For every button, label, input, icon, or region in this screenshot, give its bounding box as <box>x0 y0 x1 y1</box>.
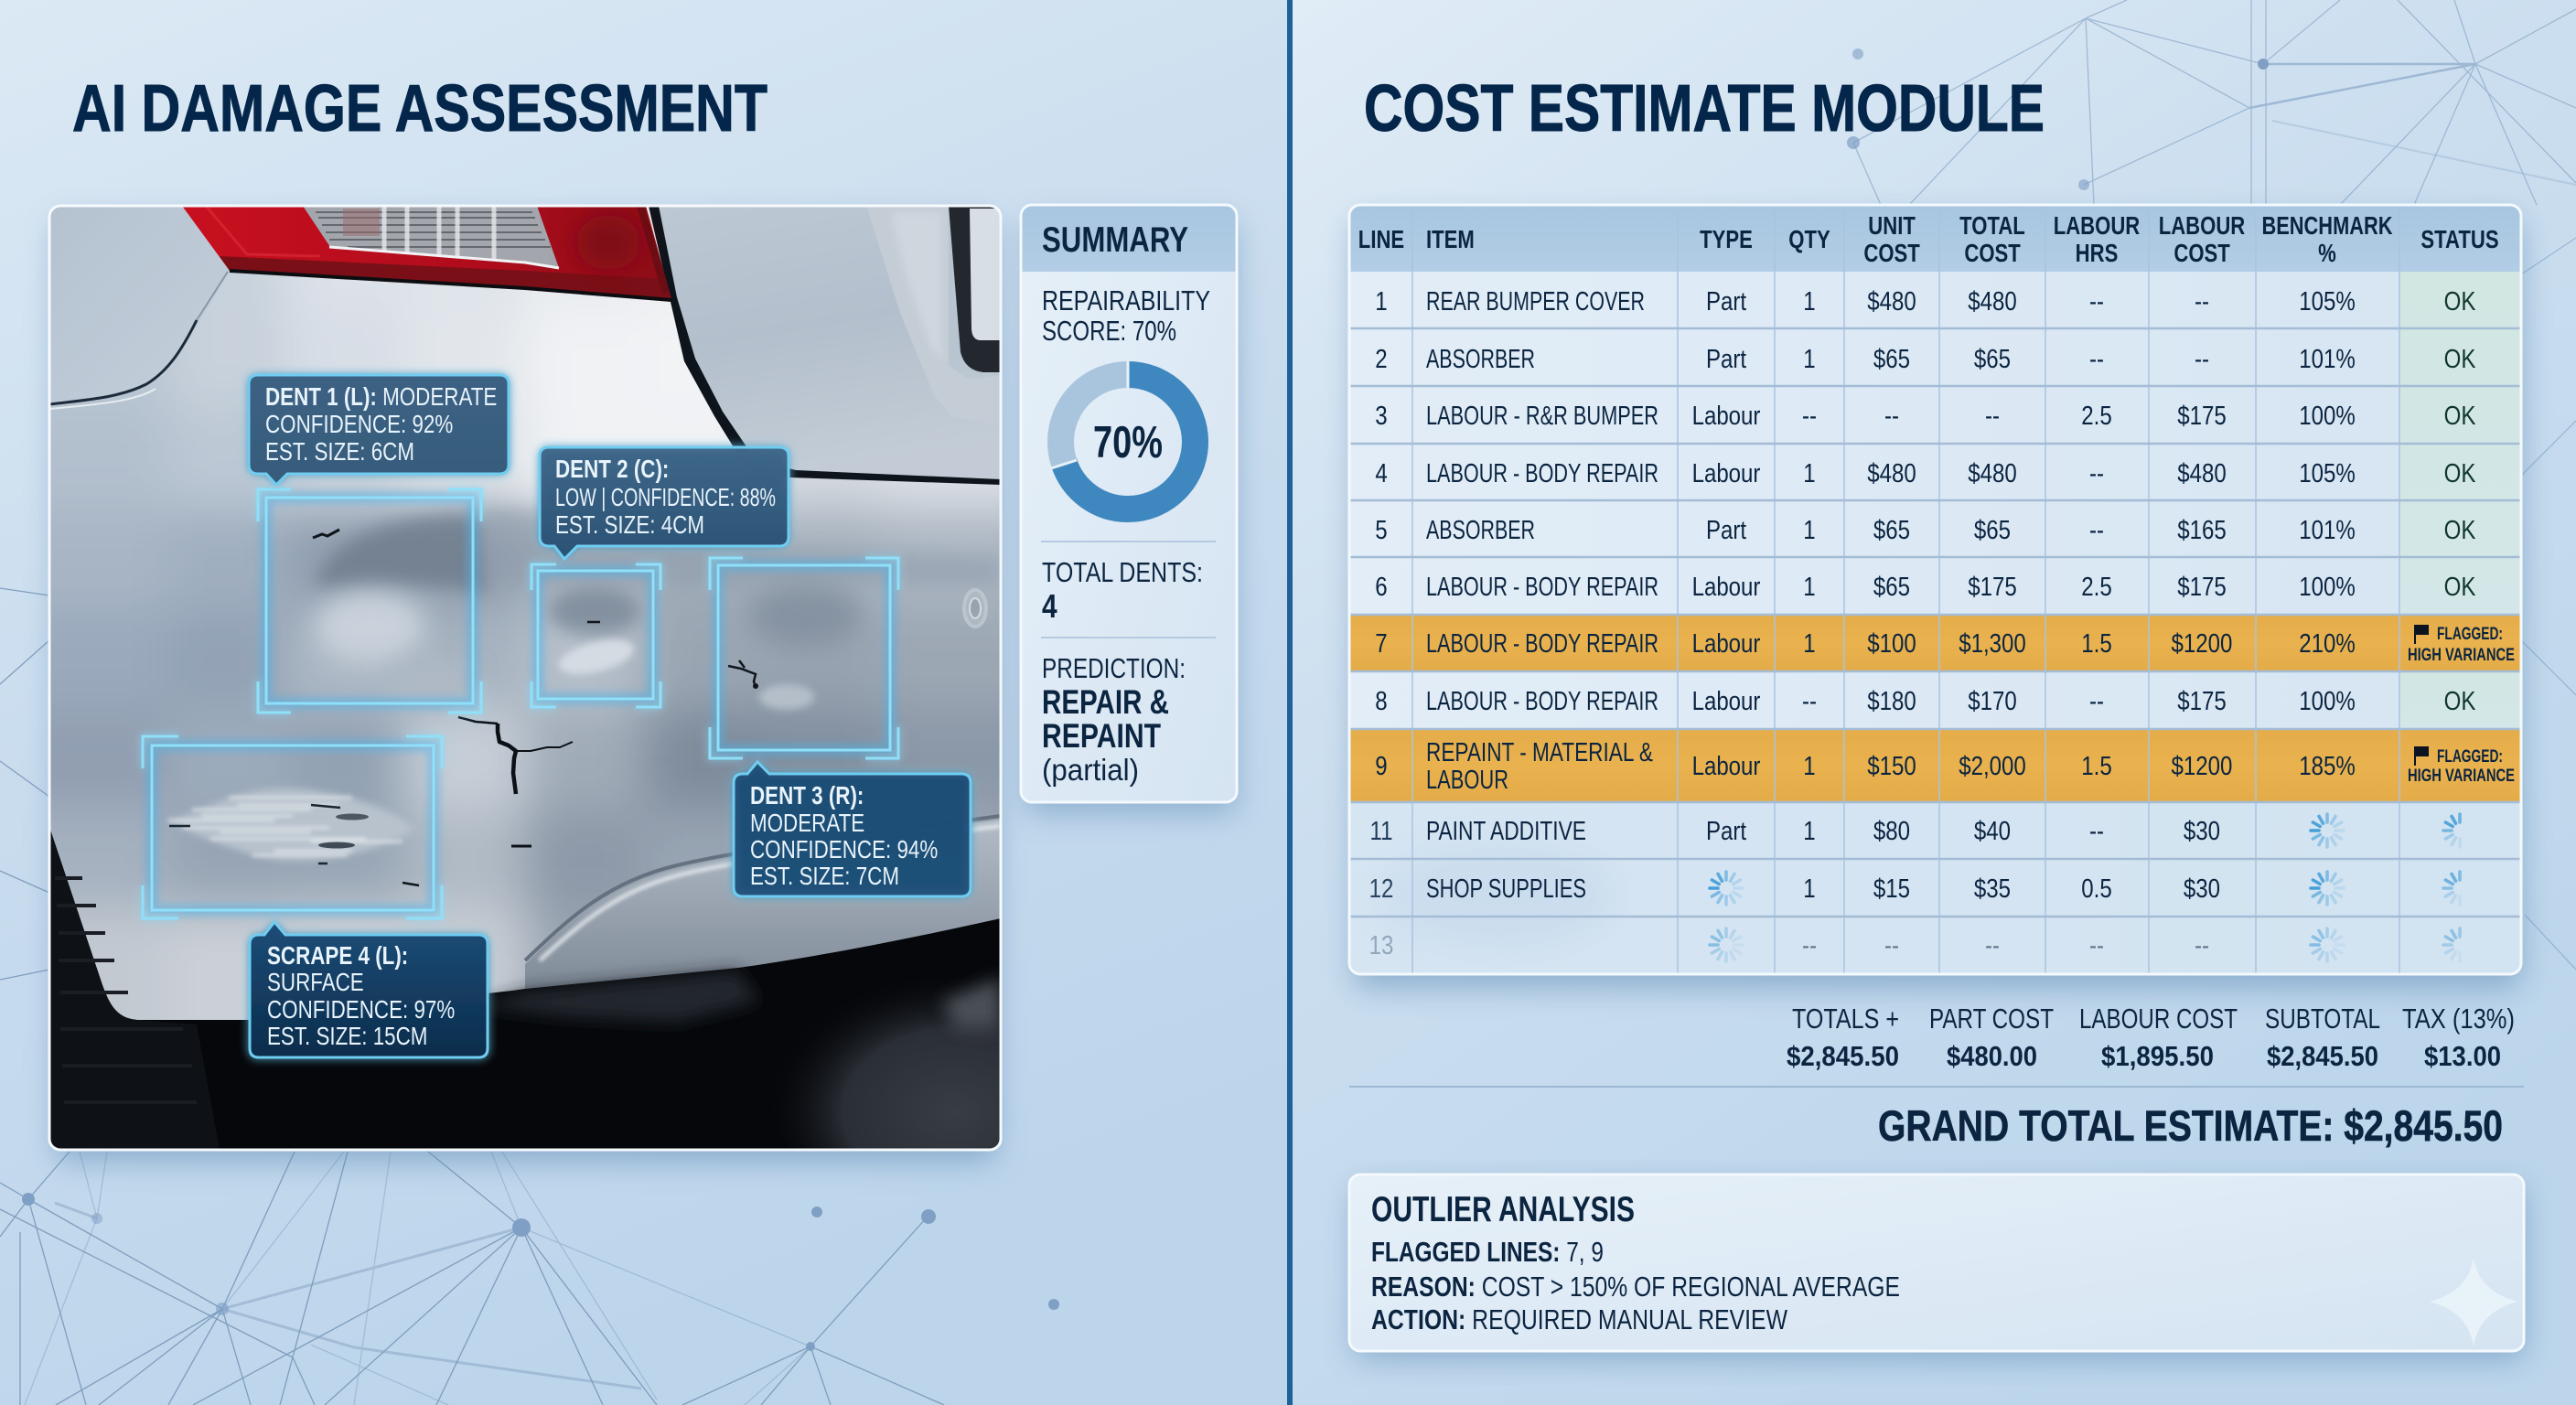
row 13: 13 <box>1369 930 1393 960</box>
photo: shadow band under the body highlight <box>329 509 1001 585</box>
photo: trunk panel <box>653 206 1001 483</box>
row 1: $480 <box>1867 286 1916 316</box>
callout: dent 2: DENT 2 (C): <box>555 456 669 484</box>
table header row: COST <box>1863 240 1920 268</box>
photo: scrape <box>168 788 419 885</box>
photo: upper rear quarter panel <box>170 207 229 311</box>
row 4: 1 <box>1803 458 1816 488</box>
row 9 flagged: 1.5 <box>2081 751 2112 781</box>
row 13: -- <box>2195 930 2209 960</box>
row 6: 100% <box>2299 572 2356 602</box>
row 1: Part <box>1706 286 1747 316</box>
totals row: $13.00 <box>2424 1040 2501 1072</box>
row 12: $15 <box>1873 874 1910 904</box>
panel: cost table <box>1349 205 2521 974</box>
row 1: $480 <box>1968 286 2017 316</box>
row 7 flagged: $1200 <box>2172 628 2232 659</box>
row 11: -- <box>2089 816 2104 846</box>
row 2: 1 <box>1803 344 1816 374</box>
callout: dent 1 <box>249 375 509 485</box>
row 7 flagged: LABOUR - BODY REPAIR <box>1426 629 1658 659</box>
totals row: $2,845.50 <box>2267 1040 2378 1072</box>
row 2: -- <box>2195 344 2209 374</box>
table header row: LABOUR <box>2159 212 2245 241</box>
detection box: dent 2 <box>531 564 660 707</box>
network pattern: left <box>0 588 944 1405</box>
prediction: REPAINT <box>1042 717 1161 755</box>
shadow: table <box>1354 220 2521 988</box>
panel: outlier analysis <box>1349 1174 2524 1351</box>
row 1: 105% <box>2299 286 2356 316</box>
photo frame <box>49 206 1001 1150</box>
row 11: $80 <box>1873 816 1910 846</box>
row 9 flagged: $1200 <box>2172 751 2232 781</box>
callout: dent 3: DENT 3 (R): <box>750 782 864 810</box>
background: left panel <box>0 0 1287 1405</box>
callout: scrape 4: EST. SIZE: 15CM <box>267 1023 427 1051</box>
callout: dent 2: LOW | CONFIDENCE: 88% <box>555 483 776 511</box>
totals row: PART COST <box>1929 1003 2054 1035</box>
row 11: 11 <box>1370 816 1392 846</box>
prediction: REPAIR & <box>1042 683 1169 721</box>
row 4: $480 <box>2177 458 2227 488</box>
row 4: $480 <box>1968 458 2017 488</box>
icon: sparkle <box>2430 1258 2517 1346</box>
totals row: TAX (13%) <box>2402 1003 2515 1035</box>
row 1 <box>1375 286 2476 316</box>
photo: dent 3 <box>728 584 862 710</box>
row 12: SHOP SUPPLIES <box>1426 874 1586 904</box>
photo: fuel door crease <box>49 272 228 409</box>
row 4: $480 <box>1867 458 1916 488</box>
row 8: OK <box>2444 686 2476 716</box>
row 6 <box>1375 572 2476 602</box>
row 6: 6 <box>1375 572 1388 602</box>
row 12: $30 <box>2184 874 2220 904</box>
outlier text <box>1371 1236 1900 1335</box>
totals row: $2,845.50 <box>1787 1040 1899 1072</box>
summary heading: SUMMARY <box>1042 220 1188 260</box>
row 7 flagged: 1 <box>1803 628 1816 659</box>
row 1: 1 <box>1803 286 1816 316</box>
row 6: LABOUR - BODY REPAIR <box>1426 573 1658 602</box>
outlier text: REASON: COST > 150% OF REGIONAL AVERAGE <box>1371 1271 1900 1303</box>
row 5: Part <box>1706 515 1747 545</box>
totals row: SUBTOTAL <box>2265 1003 2380 1035</box>
row 5: $65 <box>1974 515 2011 545</box>
prediction: PREDICTION: <box>1042 652 1186 684</box>
row 1: 1 <box>1375 286 1388 316</box>
title: AI damage assessment: AI DAMAGE ASSESSMENT <box>72 72 767 145</box>
row 5: ABSORBER <box>1426 516 1535 545</box>
row 8: $175 <box>2177 686 2227 716</box>
row 5: $65 <box>1873 515 1910 545</box>
row 4: OK <box>2444 458 2476 488</box>
background: right panel <box>1293 0 2576 1405</box>
row 3: 2.5 <box>2081 401 2112 431</box>
row 12: 1 <box>1803 874 1816 904</box>
row 2: Part <box>1706 344 1747 374</box>
detection box: scrape 4 <box>143 736 442 918</box>
row 5: 5 <box>1375 515 1388 545</box>
row 1: OK <box>2444 286 2476 316</box>
row 11: 1 <box>1803 816 1816 846</box>
row 7 flagged: FLAGGED: <box>2437 625 2503 644</box>
row 3: 100% <box>2299 401 2356 431</box>
row 9 flagged <box>1375 738 2515 795</box>
row 4: 105% <box>2299 458 2356 488</box>
row 8: 100% <box>2299 686 2356 716</box>
row 9 flagged: 1 <box>1803 751 1816 781</box>
row 7 flagged: HIGH VARIANCE <box>2408 646 2515 665</box>
detection box: dent 3 <box>710 558 898 758</box>
row 2: ABSORBER <box>1426 345 1535 374</box>
row 13: -- <box>2089 930 2104 960</box>
row 13: -- <box>1985 930 2000 960</box>
table header row: UNIT <box>1868 212 1916 241</box>
table background rows <box>1349 205 2521 974</box>
totals row: TOTALS + <box>1792 1003 1899 1035</box>
table header row: TOTAL <box>1959 212 2025 241</box>
row 6: OK <box>2444 572 2476 602</box>
row 4: 4 <box>1375 458 1388 488</box>
row 7 flagged: 1.5 <box>2081 628 2112 659</box>
row 5: OK <box>2444 515 2476 545</box>
center divider <box>1287 0 1293 1405</box>
row 7 flagged: 7 <box>1375 628 1388 659</box>
row 9 flagged: $150 <box>1867 751 1916 781</box>
row 2: 101% <box>2299 344 2356 374</box>
detection box: dent 1 <box>258 489 481 713</box>
photo: dent 1 <box>309 509 488 668</box>
row 11: Part <box>1706 816 1747 846</box>
row 3: Labour <box>1692 401 1761 431</box>
outlier text: FLAGGED LINES: 7, 9 <box>1371 1236 1604 1268</box>
repairability score: SCORE: 70% <box>1042 315 1176 347</box>
table header row: HRS <box>2076 240 2118 268</box>
row 9 flagged: $2,000 <box>1959 751 2026 781</box>
row 2: -- <box>2089 344 2104 374</box>
total dents <box>1041 542 1216 626</box>
row 8: $170 <box>1968 686 2017 716</box>
row 12 <box>1369 872 2460 905</box>
summary header <box>1021 205 1237 272</box>
row 9 flagged: REPAINT - MATERIAL & <box>1426 738 1653 767</box>
row 3: -- <box>1884 401 1899 431</box>
row 7 flagged: Labour <box>1692 628 1761 659</box>
row 8: -- <box>2089 686 2104 716</box>
row 5: -- <box>2089 515 2104 545</box>
row 8: -- <box>1802 686 1817 716</box>
callout: dent 1: EST. SIZE: 6CM <box>265 438 414 467</box>
row 7 flagged: $1,300 <box>1959 628 2026 659</box>
callout: dent 2: EST. SIZE: 4CM <box>555 511 704 540</box>
table header row: BENCHMARK <box>2261 211 2393 240</box>
totals row: $1,895.50 <box>2101 1040 2214 1072</box>
callout: scrape 4 <box>250 922 488 1057</box>
callout: scrape 4: SCRAPE 4 (L): <box>267 942 408 971</box>
shadow: photo <box>55 220 997 1162</box>
row 6: Labour <box>1692 572 1761 602</box>
row 9 flagged: 9 <box>1375 751 1388 781</box>
row 4 <box>1375 458 2476 488</box>
table header row <box>1358 211 2499 268</box>
callout: dent 3: EST. SIZE: 7CM <box>750 863 899 891</box>
row 3: -- <box>1985 401 2000 431</box>
row 7 flagged <box>1375 625 2515 665</box>
row 2: OK <box>2444 344 2476 374</box>
row 7 flagged: 210% <box>2299 628 2356 659</box>
row 5: $165 <box>2177 515 2227 545</box>
panel: summary <box>1021 205 1237 802</box>
row 2: $65 <box>1974 344 2011 374</box>
row 12: $35 <box>1974 874 2011 904</box>
callout: dent 2 <box>540 447 789 559</box>
totals row: $480.00 <box>1947 1040 2037 1072</box>
row 8: 8 <box>1375 686 1388 716</box>
row 6: $175 <box>2177 572 2227 602</box>
prediction: (partial) <box>1042 753 1139 787</box>
callout: dent 3 <box>734 762 971 896</box>
row 4: -- <box>2089 458 2104 488</box>
row 8 <box>1375 686 2476 716</box>
row 6: $175 <box>1968 572 2017 602</box>
callout: dent 3: CONFIDENCE: 94% <box>750 836 938 864</box>
callout: dent 1: DENT 1 (L): MODERATE <box>265 383 497 412</box>
photo: car body tone map <box>51 207 999 1020</box>
row 11: $40 <box>1974 816 2011 846</box>
row 11: $30 <box>2184 816 2220 846</box>
photo: dent 2 <box>549 587 640 681</box>
network pattern: right <box>1853 0 2576 970</box>
row 1: -- <box>2195 286 2209 316</box>
callout: dent 1: CONFIDENCE: 92% <box>265 411 453 439</box>
totals row: LABOUR COST <box>2079 1003 2238 1035</box>
row 5: 101% <box>2299 515 2356 545</box>
row 1: REAR BUMPER COVER <box>1426 287 1645 316</box>
totals divider <box>1349 1086 2524 1088</box>
outlier text: ACTION: REQUIRED MANUAL REVIEW <box>1371 1303 1788 1335</box>
row 3: 3 <box>1375 401 1388 431</box>
table header row: ITEM <box>1426 226 1475 254</box>
row 13 <box>1369 928 2460 961</box>
row 2: 2 <box>1375 344 1388 374</box>
photo: tail light <box>182 206 671 300</box>
row 2: $65 <box>1873 344 1910 374</box>
row 9 flagged: Labour <box>1692 751 1761 781</box>
callout: dent 3: MODERATE <box>750 810 864 838</box>
row 6: 2.5 <box>2081 572 2112 602</box>
row 9 flagged: LABOUR <box>1426 766 1508 795</box>
row 5 <box>1375 515 2476 545</box>
row 3: -- <box>1802 401 1817 431</box>
row 3: OK <box>2444 401 2476 431</box>
totals row <box>1787 1003 2515 1072</box>
title: cost estimate module: COST ESTIMATE MODULE <box>1364 72 2045 145</box>
row 4: Labour <box>1692 458 1761 488</box>
row 2 <box>1375 344 2476 374</box>
table header row: COST <box>1964 240 2021 268</box>
row 13: -- <box>1884 930 1899 960</box>
row 9 flagged: FLAGGED: <box>2437 747 2503 767</box>
outlier heading: OUTLIER ANALYSIS <box>1371 1190 1635 1229</box>
photo: lower bumper and groove <box>525 816 1001 989</box>
table header row: COST <box>2174 240 2230 268</box>
photo: plate recess <box>866 206 1001 425</box>
row 11: PAINT ADDITIVE <box>1426 817 1586 846</box>
prediction <box>1041 638 1216 787</box>
row 6: 1 <box>1803 572 1816 602</box>
photo: plate frame and plate <box>949 206 1001 372</box>
donut chart: 70%: 70% <box>1093 418 1163 467</box>
shadow: summary <box>1025 220 1237 814</box>
row 8: LABOUR - BODY REPAIR <box>1426 687 1658 716</box>
table header row: TYPE <box>1700 226 1753 254</box>
row 12: 12 <box>1369 874 1393 904</box>
row 12: 0.5 <box>2081 874 2112 904</box>
row 11 <box>1370 814 2460 847</box>
photo: trunk seam <box>649 206 1001 485</box>
repairability score: REPAIRABILITY <box>1042 284 1210 316</box>
table header row: QTY <box>1788 226 1830 254</box>
table header row: STATUS <box>2420 226 2499 254</box>
table header row: LABOUR <box>2054 212 2140 241</box>
repairability score <box>1042 284 1210 347</box>
photo: parking sensor <box>964 590 986 627</box>
row 9 flagged: HIGH VARIANCE <box>2408 767 2515 786</box>
row 8: $180 <box>1867 686 1916 716</box>
photo: cracks <box>458 717 573 846</box>
callout: scrape 4: SURFACE <box>267 969 364 997</box>
donut chart: 70% <box>1051 361 1195 509</box>
row 8: Labour <box>1692 686 1761 716</box>
panel: car damage photo with AI annotations <box>48 205 1003 1151</box>
table header row: LINE <box>1358 226 1404 254</box>
row 7 flagged: $100 <box>1867 628 1916 659</box>
row 4: LABOUR - BODY REPAIR <box>1426 459 1658 488</box>
row 9 flagged: 185% <box>2299 751 2356 781</box>
table header row: % <box>2318 240 2336 268</box>
row 3: LABOUR - R&R BUMPER <box>1426 402 1658 431</box>
shadow: outlier <box>1354 1185 2524 1359</box>
row 5: 1 <box>1803 515 1816 545</box>
total dents: TOTAL DENTS: <box>1042 556 1203 588</box>
row 1: -- <box>2089 286 2104 316</box>
row 6: $65 <box>1873 572 1910 602</box>
callout: scrape 4: CONFIDENCE: 97% <box>267 996 455 1024</box>
photo: ground and tyre <box>49 827 1079 1203</box>
row 3: $175 <box>2177 401 2227 431</box>
total dents: 4 <box>1042 588 1057 626</box>
row 3 <box>1375 401 2476 431</box>
row 13: -- <box>1802 930 1817 960</box>
table grid <box>1349 205 2521 974</box>
